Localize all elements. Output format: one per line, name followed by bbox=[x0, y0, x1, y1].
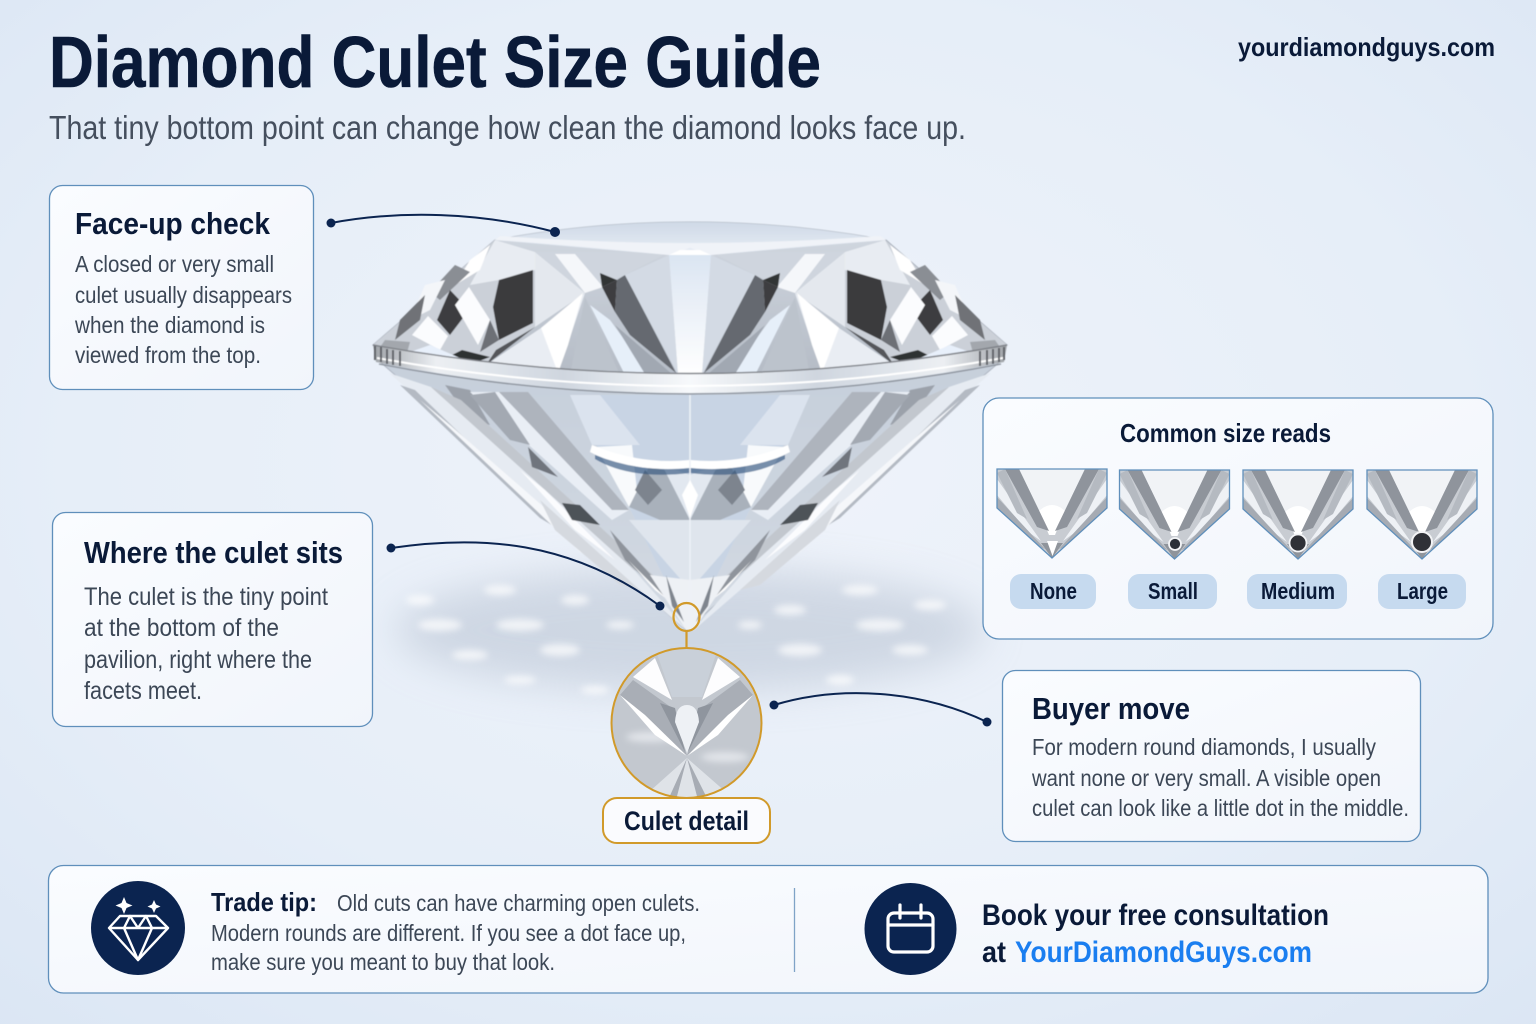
panel: where the culet sits bbox=[52, 512, 372, 726]
culet marker ring bbox=[674, 603, 700, 649]
culet size: small: Small bbox=[1148, 578, 1198, 604]
diamond reflection caustics bbox=[395, 568, 985, 694]
panel: where the culet sits: pavilion, right where the bbox=[84, 646, 312, 674]
panel: where the culet sits: Where the culet sits bbox=[84, 535, 343, 570]
connector: culet location bbox=[386, 542, 664, 610]
panel: buyer move: want none or very small. A visible open bbox=[1031, 765, 1381, 791]
culet detail magnifier bbox=[610, 646, 764, 800]
consultation call to action: YourDiamondGuys.com bbox=[1015, 936, 1312, 969]
connector: buyer move bbox=[770, 693, 992, 726]
panel: face-up check bbox=[50, 186, 314, 390]
culet size: small bbox=[1120, 470, 1230, 609]
panel: face-up check: viewed from the top. bbox=[75, 342, 261, 368]
connector: face-up check bbox=[326, 215, 560, 237]
subtitle: That tiny bottom point can change how clean the diamond looks face up. bbox=[49, 109, 966, 146]
consultation call to action: at bbox=[982, 936, 1006, 969]
trade tip text: make sure you meant to buy that look. bbox=[211, 949, 555, 975]
panel: face-up check: A closed or very small bbox=[75, 251, 274, 277]
culet size: medium bbox=[1243, 470, 1353, 609]
trade tip text bbox=[211, 887, 700, 975]
culet size: none: None bbox=[1030, 578, 1077, 604]
panel: buyer move: Buyer move bbox=[1032, 691, 1190, 726]
consultation call to action bbox=[982, 899, 1329, 969]
title: Diamond Culet Size Guide bbox=[49, 23, 821, 103]
panel: common size reads bbox=[983, 398, 1493, 639]
panel: where the culet sits: facets meet. bbox=[84, 677, 202, 705]
girdle bbox=[373, 345, 1007, 394]
culet size: large bbox=[1367, 470, 1477, 609]
culet size: medium: Medium bbox=[1261, 578, 1335, 604]
panel: face-up check: culet usually disappears bbox=[75, 282, 292, 308]
pavilion bbox=[378, 360, 1002, 630]
trade tip text: Old cuts can have charming open culets. bbox=[337, 890, 700, 916]
icon: diamond bbox=[91, 881, 185, 975]
trade tip text: Trade tip: bbox=[211, 887, 317, 917]
panel: face-up check: Face-up check bbox=[75, 206, 271, 241]
panel: where the culet sits: at the bottom of the bbox=[84, 614, 279, 642]
culet size: none bbox=[997, 469, 1107, 609]
panel: face-up check: when the diamond is bbox=[74, 312, 265, 338]
panel: buyer move: For modern round diamonds, I usually bbox=[1032, 734, 1376, 760]
icon: calendar bbox=[864, 883, 956, 975]
panel: buyer move: culet can look like a little dot in the middle. bbox=[1032, 795, 1409, 821]
culet size: large: Large bbox=[1397, 578, 1448, 604]
heading: Common size reads bbox=[1120, 418, 1331, 448]
panel: bottom bar bbox=[48, 866, 1488, 993]
culet detail label bbox=[603, 798, 770, 843]
panel: buyer move bbox=[1002, 670, 1420, 842]
diamond illustration bbox=[373, 222, 1007, 630]
crown bbox=[373, 222, 1007, 375]
panel: where the culet sits: The culet is the tiny point bbox=[84, 583, 328, 611]
culet detail label: Culet detail bbox=[624, 806, 749, 836]
consultation call to action: Book your free consultation bbox=[982, 899, 1329, 932]
website: yourdiamondguys.com bbox=[1238, 32, 1495, 62]
trade tip text: Modern rounds are different. If you see a dot face up, bbox=[211, 920, 686, 946]
